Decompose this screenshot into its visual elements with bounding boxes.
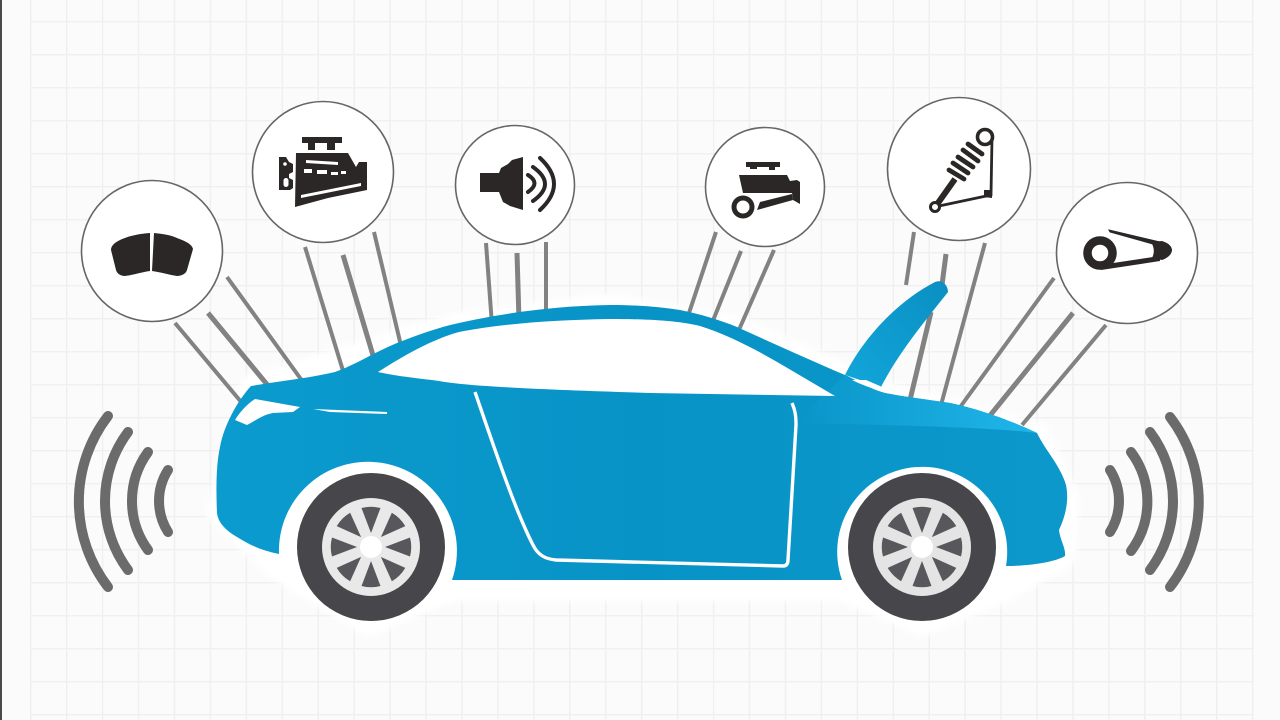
headlight bbox=[235, 399, 300, 425]
icon: shock absorber bbox=[930, 130, 992, 212]
rear wheel bbox=[297, 473, 445, 621]
popped hood bbox=[845, 281, 948, 387]
front wheel bbox=[848, 473, 996, 621]
connector rays from icons to car bbox=[175, 232, 1106, 425]
rays: belt bbox=[958, 278, 1106, 425]
icon circle: belt bbox=[1056, 182, 1198, 324]
icon: jack bbox=[732, 162, 800, 218]
icon: brake pads bbox=[111, 233, 193, 276]
rays: brake pads bbox=[175, 277, 303, 403]
icon circle: engine bbox=[252, 102, 394, 242]
sound waves: left bbox=[79, 416, 168, 587]
rays: engine bbox=[305, 232, 402, 374]
icon: speaker bbox=[480, 157, 554, 210]
hood highlight band bbox=[800, 375, 1037, 433]
body highlight bbox=[313, 409, 387, 414]
rays: jack bbox=[688, 232, 774, 332]
icon: engine bbox=[279, 137, 367, 207]
white halo under car bbox=[217, 305, 1068, 625]
hood gap sliver bbox=[852, 380, 888, 392]
icon: belt and pulley bbox=[1088, 230, 1172, 270]
icon circle: suspension bbox=[888, 98, 1030, 240]
car bbox=[216, 281, 1067, 621]
rays: suspension bbox=[906, 232, 985, 405]
door outline bbox=[475, 392, 796, 566]
windshield and side window bbox=[378, 319, 835, 396]
icon circle: brake pads bbox=[82, 180, 222, 322]
car body bbox=[216, 305, 1067, 580]
rays: speaker bbox=[486, 242, 546, 325]
icon circle: jack bbox=[706, 128, 824, 246]
icon circle: speaker bbox=[456, 126, 574, 244]
sound waves: right bbox=[1110, 417, 1199, 587]
